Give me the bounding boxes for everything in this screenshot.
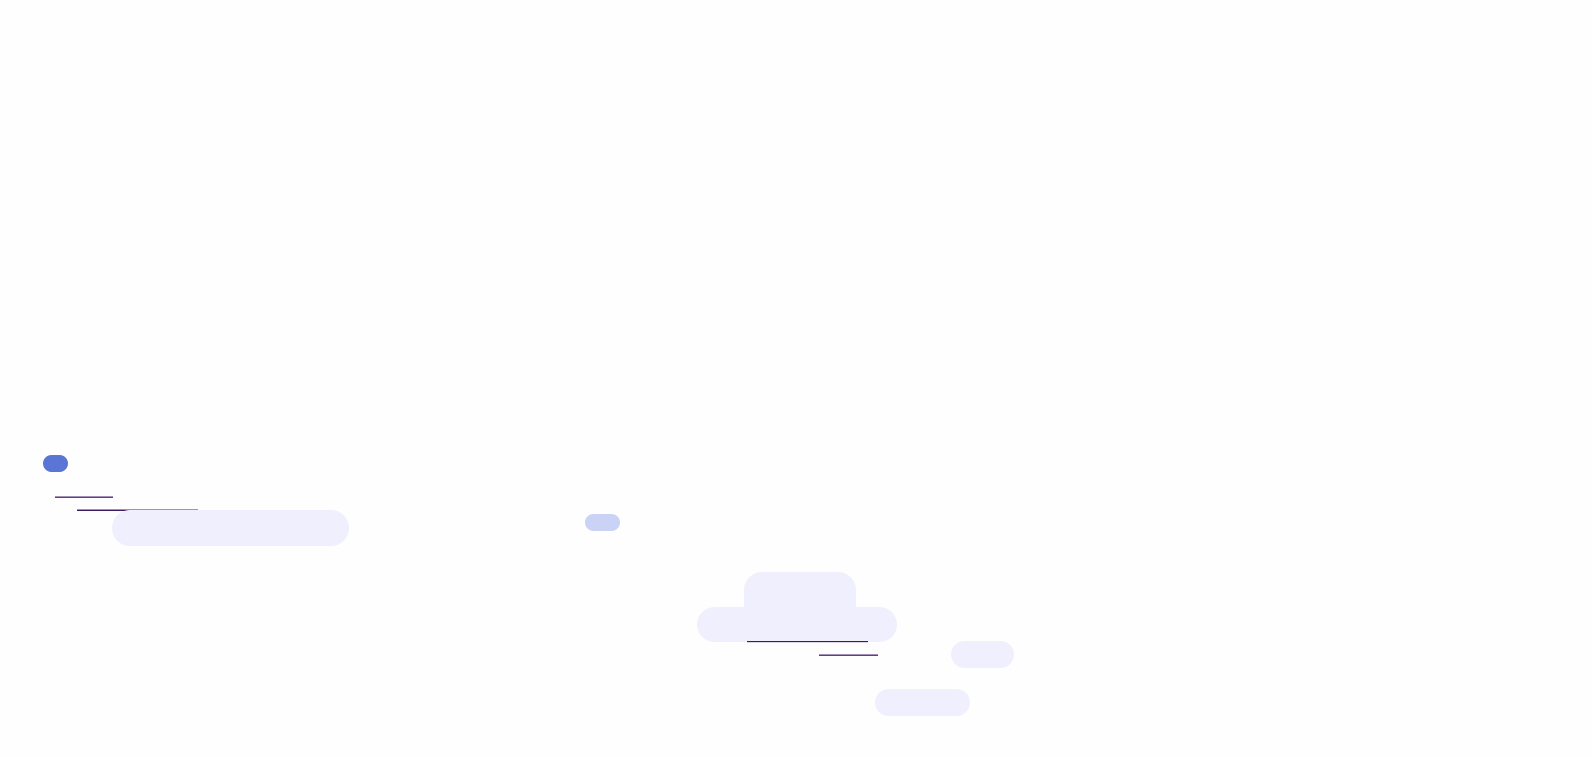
highlight: right pill [951, 641, 1014, 668]
badge: pale blue pill [585, 514, 620, 531]
badge: blue pill [43, 455, 68, 472]
highlight: bottom pill [875, 689, 970, 716]
underline: long left [77, 509, 198, 511]
highlight: top block [744, 572, 856, 622]
highlight: wide left pill [112, 510, 349, 546]
highlight: wide centre pill [697, 607, 897, 642]
underline: centre long [747, 641, 868, 643]
underline: centre short [819, 654, 878, 656]
underline: short left [55, 496, 113, 498]
